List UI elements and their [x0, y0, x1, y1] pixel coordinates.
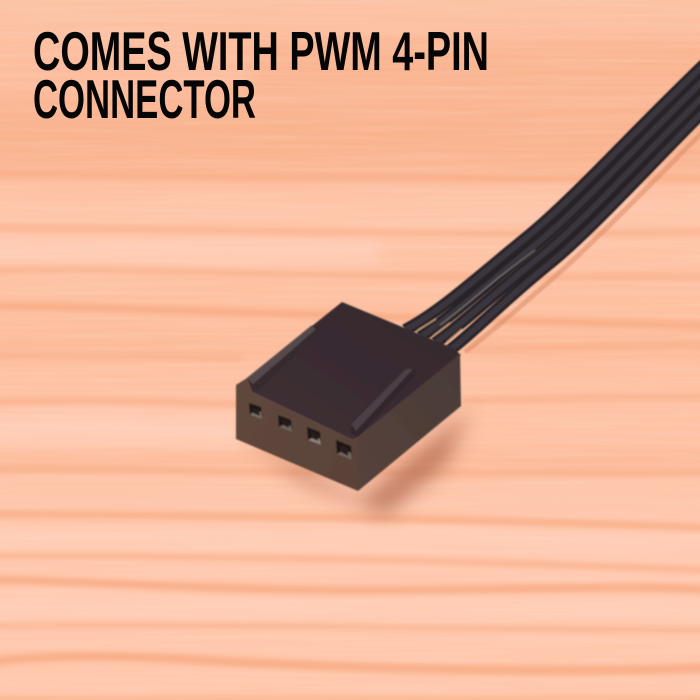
connector shadow [250, 410, 470, 516]
wire gap highlights [440, 250, 535, 325]
pin hole 3 [307, 427, 321, 445]
front face [236, 378, 358, 491]
connector housing [236, 302, 461, 491]
right face [358, 354, 461, 491]
title line 2: CONNECTOR [33, 68, 256, 130]
cable shadow [465, 94, 700, 352]
pin hole 1 [249, 403, 262, 419]
title line 1: COMES WITH PWM 4-PIN [33, 20, 489, 82]
pin hole 4 [336, 440, 352, 460]
ridge: right latch rail [351, 368, 416, 437]
wire outlines [405, 56, 700, 350]
ridge: left latch rail [247, 325, 318, 391]
pin hole 2 [278, 415, 292, 432]
title [33, 20, 489, 130]
top face [247, 302, 461, 440]
wire sheen [405, 56, 700, 350]
wires: four-strand black cable [405, 56, 700, 352]
